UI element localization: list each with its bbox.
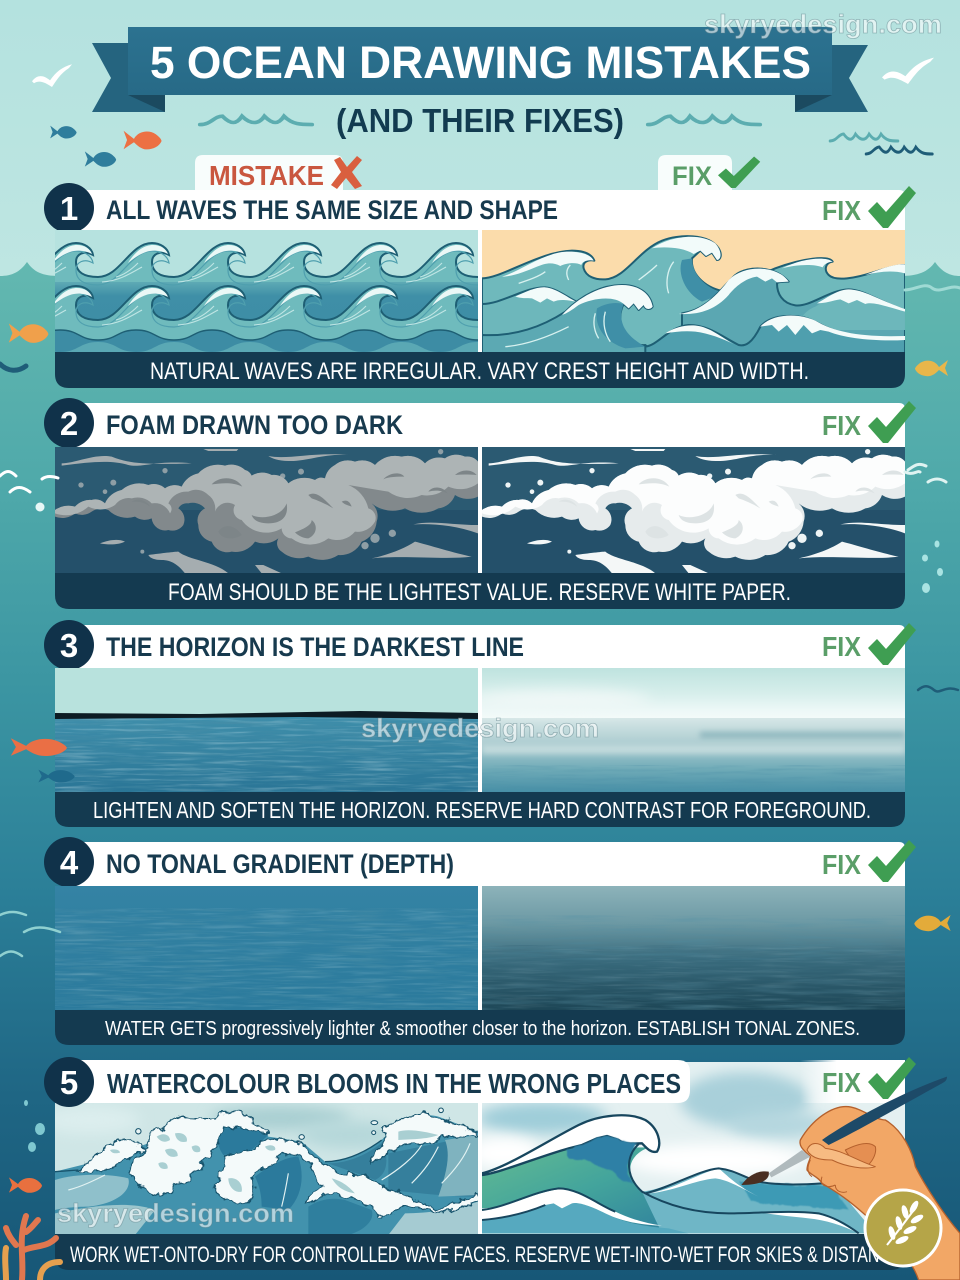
bubble white left <box>36 502 44 512</box>
panel 3 header: 3 <box>60 627 78 664</box>
panel 4 header <box>44 837 916 887</box>
fish blue lower <box>85 151 116 167</box>
fix image: soft horizon <box>470 668 905 792</box>
fish yellow lower right <box>914 915 951 931</box>
fix image: varied waves <box>482 230 905 355</box>
badge: wheat emblem <box>865 1190 941 1266</box>
bubbles left <box>24 1100 45 1152</box>
illustration: painting hand with brush <box>741 1077 960 1280</box>
divider <box>478 1103 482 1234</box>
panel 1 caption <box>55 352 905 388</box>
fish orange top <box>124 131 162 149</box>
panel 4 header: FIX <box>822 849 861 880</box>
panel 5 header: WATERCOLOUR BLOOMS IN THE WRONG PLACES <box>107 1068 681 1099</box>
fish blue top <box>50 126 77 139</box>
mistake image: flat tone water <box>55 886 478 1010</box>
watermark center: skyryedesign.com <box>361 713 599 743</box>
panel 1: waves <box>0 183 916 450</box>
panel 2 header: 2 <box>60 405 78 442</box>
panel 3 header: FIX <box>822 631 861 662</box>
panel 1 header: FIX <box>822 195 861 226</box>
fish blue middle <box>38 770 75 783</box>
panel 2 caption <box>55 573 905 609</box>
fish orange left <box>9 323 48 343</box>
mistake image: hard dark horizon <box>55 668 478 792</box>
divider <box>478 668 482 792</box>
panel 1 header <box>44 183 916 233</box>
panel 1 header: ALL WAVES THE SAME SIZE AND SHAPE <box>106 195 558 225</box>
icon: green check <box>718 156 760 188</box>
panel 4 header: 4 <box>60 844 79 881</box>
water ripples around the page <box>0 286 960 956</box>
panel 2 header <box>44 398 916 448</box>
divider <box>478 447 482 573</box>
coral bottom left <box>5 1216 60 1280</box>
watermark bottom: skyryedesign.com <box>57 1198 294 1228</box>
divider <box>478 886 482 1010</box>
background: shallow sky band <box>0 0 960 300</box>
seagull left <box>32 64 72 87</box>
fix image: white foam <box>482 447 905 573</box>
column tab: fix <box>658 155 760 191</box>
column tab: fix: FIX <box>672 161 712 191</box>
subtitle: (AND THEIR FIXES) <box>336 102 624 139</box>
divider <box>478 230 482 352</box>
column tab: mistake: MISTAKE <box>209 160 324 191</box>
icon: red cross <box>331 156 362 189</box>
mistake image: blotchy watercolour wave <box>40 1103 478 1235</box>
fish orange lower left <box>9 1177 42 1193</box>
panel 5 caption <box>55 1234 906 1270</box>
panel 4: tonal gradient <box>44 837 916 1045</box>
background: ocean gradient with scalloped waterline <box>0 262 960 1280</box>
panel 5 header <box>44 1057 916 1107</box>
panel 3: horizon <box>44 620 916 827</box>
bubbles right <box>922 540 943 593</box>
title text: 5 OCEAN DRAWING MISTAKES <box>150 37 811 88</box>
fix image: controlled wave with soft sky <box>470 1062 905 1234</box>
panel 2 header: FIX <box>822 410 861 441</box>
panel 4 header: NO TONAL GRADIENT (DEPTH) <box>106 849 454 879</box>
panel 1 caption: NATURAL WAVES ARE IRREGULAR. VARY CREST HEIGHT AND WIDTH. <box>150 358 809 385</box>
panel 4 caption <box>55 1010 905 1045</box>
watermark top: skyryedesign.com <box>704 9 942 39</box>
panel 2 caption: FOAM SHOULD BE THE LIGHTEST VALUE. RESERVE WHITE PAPER. <box>168 579 791 606</box>
fix image: graded water <box>482 886 905 1010</box>
mistake image: grey foam <box>55 447 478 573</box>
panel 5: watercolour blooms <box>40 1057 916 1270</box>
panel 3 header: THE HORIZON IS THE DARKEST LINE <box>106 632 524 662</box>
panel 5 header: 5 <box>60 1064 78 1101</box>
fish orange middle <box>11 738 67 756</box>
mistake image: identical waves <box>55 230 478 352</box>
panel 3 header <box>44 620 916 670</box>
decorative waves top right <box>830 134 932 154</box>
column tab: mistake <box>195 155 362 191</box>
panel 2 header: FOAM DRAWN TOO DARK <box>106 410 403 440</box>
panel 5 header: FIX <box>822 1067 861 1098</box>
fish yellow right <box>915 360 948 376</box>
panel 1 header: 1 <box>60 190 78 227</box>
seagull right <box>882 58 934 84</box>
wave flourish right of subtitle <box>648 116 760 125</box>
panel 2: foam <box>44 398 916 609</box>
title ribbon <box>92 27 868 112</box>
panel 3 caption <box>55 792 905 827</box>
wave flourish left of subtitle <box>200 116 312 125</box>
